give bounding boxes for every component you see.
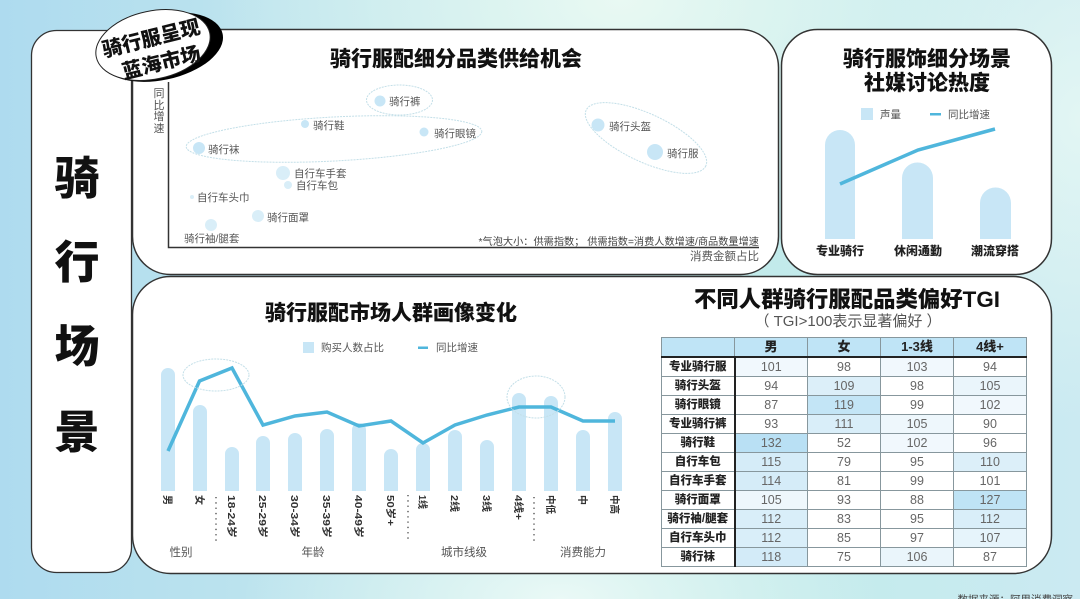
category labels: 潮流穿搭 bbox=[971, 243, 1019, 258]
table: TGI preferences: 85 bbox=[837, 531, 851, 545]
category labels: 休闲通勤 bbox=[894, 243, 942, 258]
table: TGI preferences: 111 bbox=[834, 417, 854, 431]
heading: vertical scene title: 景 bbox=[54, 407, 100, 458]
category labels: 专业骑行 bbox=[816, 243, 864, 258]
table: TGI preferences: 127 bbox=[980, 493, 1000, 507]
table: TGI preferences: 95 bbox=[910, 455, 924, 469]
badge: blue ocean market bbox=[89, 0, 229, 92]
legend: 同比增速 bbox=[948, 108, 990, 121]
group labels: 城市线级 bbox=[441, 545, 487, 559]
heading: social title bbox=[843, 47, 1011, 95]
heading: vertical scene title bbox=[54, 153, 100, 458]
group labels: 消费能力 bbox=[560, 545, 606, 559]
rotated category labels: 18-24岁 bbox=[225, 495, 238, 538]
y axis label: 速 bbox=[154, 122, 164, 135]
table: TGI preferences: 93 bbox=[764, 417, 778, 431]
rotated category labels: 中 bbox=[576, 495, 589, 505]
bubble labels: 骑行面罩 bbox=[267, 211, 309, 224]
bubble size note: *气泡大小：供需指数； 供需指数=消费人数增速/商品数量增速 bbox=[479, 235, 759, 248]
rotated category labels: 女 bbox=[193, 495, 206, 505]
bubble labels: 骑行袜 bbox=[208, 143, 240, 156]
highlight ellipses bbox=[183, 359, 565, 418]
table: TGI preferences: 119 bbox=[834, 398, 854, 412]
table: TGI preferences: 93 bbox=[837, 493, 851, 507]
heading: audience title: 骑行服配市场人群画像变化 bbox=[265, 301, 517, 325]
x axis label: 消费金额占比 bbox=[690, 249, 759, 263]
table: TGI preferences: 94 bbox=[983, 360, 997, 374]
table: TGI preferences: 87 bbox=[983, 550, 997, 564]
rotated category labels: 50岁+ bbox=[384, 495, 397, 526]
table: TGI preferences: 96 bbox=[983, 436, 997, 450]
bubble labels: 骑行鞋 bbox=[313, 119, 345, 132]
table: TGI preferences: 99 bbox=[910, 398, 924, 412]
table: TGI preferences: 4线+ bbox=[976, 339, 1004, 354]
bubble labels: 骑行裤 bbox=[389, 95, 420, 108]
table: TGI preferences: 112 bbox=[761, 512, 781, 526]
table: TGI preferences bbox=[661, 337, 1027, 567]
heading: vertical scene title: 场 bbox=[54, 321, 100, 372]
table: TGI preferences: 女 bbox=[837, 339, 850, 354]
legend: 同比增速 bbox=[436, 341, 478, 354]
rotated category labels: 男 bbox=[161, 495, 173, 505]
table: TGI preferences: 105 bbox=[907, 417, 927, 431]
table: TGI preferences: 107 bbox=[980, 531, 1000, 545]
table: TGI preferences: 94 bbox=[764, 379, 778, 393]
rotated category labels: 中低 bbox=[544, 495, 557, 514]
table: TGI preferences: 98 bbox=[910, 379, 924, 393]
legend bbox=[303, 341, 478, 354]
table: TGI preferences: 骑行眼镜 bbox=[675, 399, 721, 411]
table: TGI preferences: 专业骑行服 bbox=[669, 361, 726, 373]
legend: 购买人数占比 bbox=[321, 341, 384, 354]
bubble labels: 自行车包 bbox=[296, 179, 338, 192]
rotated category labels: 25-29岁 bbox=[256, 495, 269, 538]
table: TGI preferences: 专业骑行裤 bbox=[669, 418, 726, 430]
table: TGI preferences: 自行车包 bbox=[675, 456, 721, 468]
bubble labels: 骑行袖/腿套 bbox=[184, 232, 240, 245]
chart axes bbox=[168, 82, 759, 248]
bubble labels: 自行车手套 bbox=[294, 167, 347, 180]
rotated category labels: 35-39岁 bbox=[320, 495, 333, 538]
table: TGI preferences: 90 bbox=[983, 417, 997, 431]
heading: bubble chart title: 骑行服配细分品类供给机会 bbox=[330, 47, 582, 71]
heading: social title: 骑行服饰细分场景 bbox=[843, 47, 1011, 71]
category labels bbox=[816, 243, 1019, 258]
group labels bbox=[170, 545, 606, 559]
table: TGI preferences: 75 bbox=[837, 550, 851, 564]
bubble labels: 骑行眼镜 bbox=[434, 127, 476, 140]
table: TGI preferences: 97 bbox=[910, 531, 924, 545]
table: TGI preferences: 101 bbox=[761, 360, 782, 374]
legend: 声量 bbox=[880, 108, 901, 121]
table: TGI preferences: 101 bbox=[980, 474, 1000, 488]
rotated category labels: 3线 bbox=[480, 495, 493, 512]
table: TGI preferences: 骑行面罩 bbox=[675, 494, 721, 506]
badge: blue ocean market: 骑行服呈现 bbox=[100, 15, 202, 62]
y axis label bbox=[154, 88, 164, 135]
group labels: 年龄 bbox=[302, 545, 325, 559]
table: TGI preferences: 110 bbox=[980, 455, 1000, 469]
heading: social title: 社媒讨论热度 bbox=[864, 71, 990, 95]
growth line bbox=[840, 129, 995, 184]
heading: vertical scene title: 行 bbox=[54, 237, 100, 288]
table: TGI preferences: 52 bbox=[837, 436, 851, 450]
panel: supply opportunity bubble chart bbox=[132, 30, 778, 274]
table: TGI preferences: 1-3线 bbox=[901, 339, 933, 354]
table: TGI preferences: 115 bbox=[761, 455, 781, 469]
table: TGI preferences: 骑行袜 bbox=[680, 551, 715, 563]
table: TGI preferences: 102 bbox=[980, 398, 1000, 412]
bubbles bbox=[190, 96, 663, 231]
table: TGI preferences: 自行车手套 bbox=[669, 475, 726, 487]
rotated category labels: 中高 bbox=[608, 495, 621, 514]
rotated category labels: 40-49岁 bbox=[352, 495, 365, 538]
legend bbox=[861, 108, 990, 121]
table: TGI preferences: 105 bbox=[761, 493, 782, 507]
group labels: 性别 bbox=[170, 545, 192, 559]
bars bbox=[825, 130, 1011, 239]
table: TGI preferences: 105 bbox=[980, 379, 1000, 393]
TGI subtitle: （ TGI>100表示显著偏好 ） bbox=[754, 313, 942, 330]
highlight ellipses bbox=[185, 85, 716, 188]
bubble labels bbox=[184, 95, 699, 245]
bubble labels: 骑行服 bbox=[667, 147, 699, 160]
rotated category labels: 30-34岁 bbox=[288, 495, 301, 538]
table: TGI preferences: 102 bbox=[907, 436, 927, 450]
bubble labels: 骑行头盔 bbox=[609, 120, 651, 133]
table: TGI preferences: 118 bbox=[761, 550, 781, 564]
table: TGI preferences: 99 bbox=[910, 474, 924, 488]
rotated category labels bbox=[161, 495, 621, 538]
table: TGI preferences: 103 bbox=[907, 360, 927, 374]
bar chart: buyer share bbox=[161, 368, 622, 491]
y axis label: 同 bbox=[154, 88, 164, 100]
table: TGI preferences: 88 bbox=[910, 493, 924, 507]
table: TGI preferences: 98 bbox=[837, 360, 851, 374]
panel: social discussion heat bbox=[782, 30, 1052, 274]
table: TGI preferences: 自行车头巾 bbox=[669, 532, 726, 544]
rotated category labels: 1线 bbox=[416, 495, 429, 509]
line chart: yoy growth bbox=[168, 368, 615, 451]
table: TGI preferences: 95 bbox=[910, 512, 924, 526]
badge: blue ocean market: 蓝海市场 bbox=[120, 41, 203, 84]
rotated category labels: 4线+ bbox=[512, 495, 525, 520]
heading: TGI title: 不同人群骑行服配品类偏好TGI bbox=[694, 287, 1000, 312]
y axis label: 增 bbox=[154, 109, 164, 123]
table: TGI preferences: 83 bbox=[837, 512, 851, 526]
bubble labels: 自行车头巾 bbox=[197, 191, 250, 204]
table: TGI preferences: 骑行鞋 bbox=[680, 437, 715, 449]
table: TGI preferences: 87 bbox=[764, 398, 778, 412]
table: TGI preferences: 骑行头盔 bbox=[675, 380, 721, 392]
y axis label: 比 bbox=[154, 99, 164, 112]
heading: vertical scene title: 骑 bbox=[54, 153, 100, 204]
table: TGI preferences: 骑行袖/腿套 bbox=[667, 513, 728, 525]
table: TGI preferences: 112 bbox=[980, 512, 1000, 526]
table: TGI preferences: 男 bbox=[764, 339, 778, 354]
panel: left scene label bbox=[32, 30, 132, 572]
table: TGI preferences: 109 bbox=[834, 379, 854, 393]
table: TGI preferences: 114 bbox=[761, 474, 781, 488]
table: TGI preferences: 106 bbox=[907, 550, 927, 564]
table: TGI preferences: 112 bbox=[761, 531, 781, 545]
rotated category labels: 2线 bbox=[448, 495, 461, 512]
table: TGI preferences: 79 bbox=[837, 455, 851, 469]
table: TGI preferences: 81 bbox=[837, 474, 851, 488]
table: TGI preferences: 132 bbox=[761, 436, 782, 450]
panel: audience portrait and TGI bbox=[132, 276, 1052, 574]
